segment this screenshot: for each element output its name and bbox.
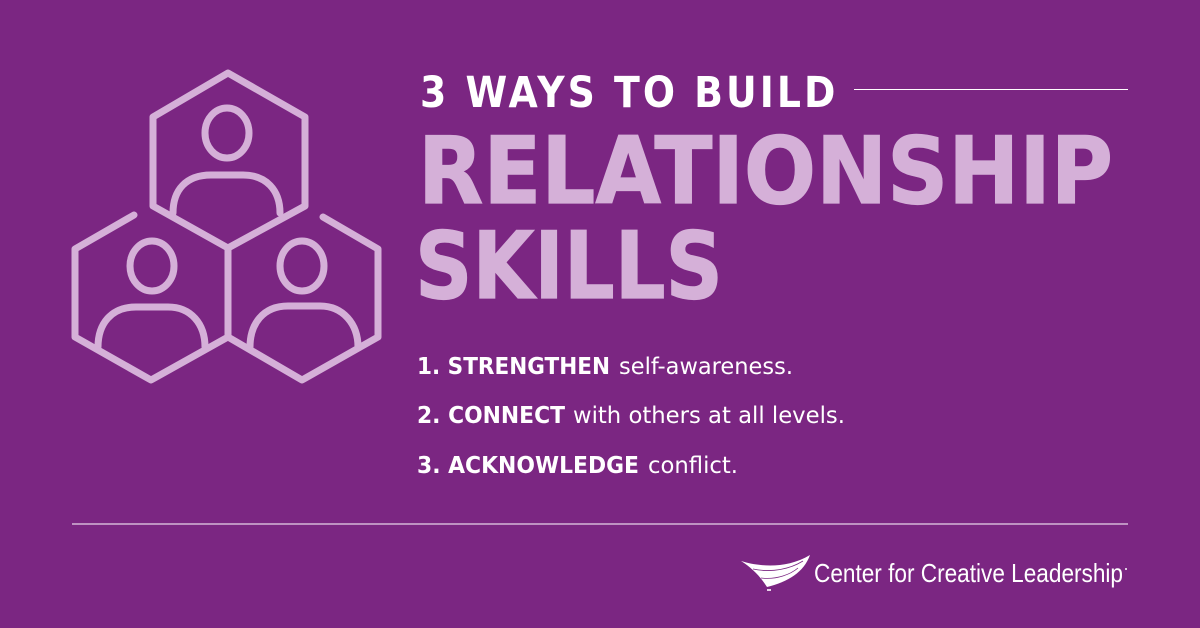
list item 3: 3. ACKNOWLEDGE [417,453,639,479]
heading: relationship: RELATIONSHIP [418,117,1113,225]
icon: left hexagon with person [75,215,228,380]
icon: leaf mark [741,555,810,591]
icon: three people in hexagons [75,73,378,380]
list item 2 [417,403,845,429]
list item 2: with others at all levels. [573,403,845,429]
logo: Center for Creative Leadership [741,555,1127,591]
icon: right hexagon with person [228,217,378,380]
heading: skills: SKILLS [415,212,723,320]
list item 2: 2. CONNECT [417,403,565,429]
heading: 3 ways to build: 3 WAYS TO BUILD [420,67,835,118]
list item 1 [417,354,793,380]
list item 3: conflict. [648,453,738,479]
logo: Center for Creative Leadership: Center for Creative Leadership [814,558,1123,588]
list item 1: 1. STRENGTHEN [417,354,610,380]
icon: top hexagon with person [153,73,305,248]
list item 1: self-awareness. [619,354,793,380]
